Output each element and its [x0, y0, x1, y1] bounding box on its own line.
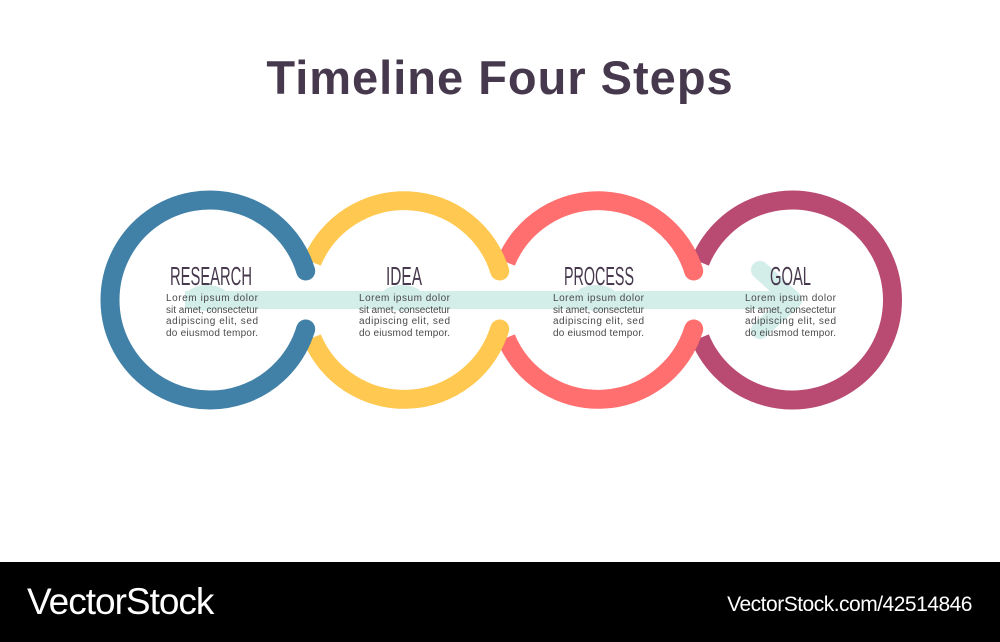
ring: process (red) — [506, 201, 703, 399]
step 1 text — [166, 261, 259, 339]
step 1 text: sit amet, consectetur — [166, 305, 259, 316]
footer bar — [0, 562, 1000, 642]
step 2 text: Lorem ipsum dolor — [359, 293, 451, 304]
step 3 text: sit amet, consectetur — [553, 305, 645, 316]
step 4 text: GOAL — [770, 261, 811, 291]
step 1 text: RESEARCH — [170, 261, 252, 291]
step 1 text: Lorem ipsum dolor — [166, 293, 259, 304]
ring: idea (yellow) — [312, 201, 509, 399]
step 4 text: adipiscing elit, sed — [745, 316, 836, 327]
step 3 text — [553, 261, 645, 339]
step 4 text: Lorem ipsum dolor — [745, 293, 837, 304]
step 4 text: do eiusmod tempor. — [745, 328, 836, 339]
step 2 text — [359, 261, 451, 339]
step 2 text: IDEA — [386, 261, 422, 291]
footer url: VectorStock.com/42514846 — [727, 593, 972, 616]
ring: research (blue) — [110, 200, 315, 400]
step 2 text: sit amet, consectetur — [359, 305, 451, 316]
step 4 text: sit amet, consectetur — [745, 305, 837, 316]
title: Timeline Four Steps — [266, 51, 734, 104]
ring: goal (purple) — [700, 200, 892, 400]
step 3 text: PROCESS — [564, 261, 634, 291]
step 4 text — [745, 261, 837, 339]
step 1 text: do eiusmod tempor. — [166, 328, 258, 339]
step 3 text: Lorem ipsum dolor — [553, 293, 645, 304]
step 3 text: adipiscing elit, sed — [553, 316, 644, 327]
footer logo: VectorStock — [27, 581, 213, 622]
arrow: timeline band — [185, 270, 793, 330]
step 2 text: do eiusmod tempor. — [359, 328, 450, 339]
step 3 text: do eiusmod tempor. — [553, 328, 644, 339]
step 2 text: adipiscing elit, sed — [359, 316, 450, 327]
step 1 text: adipiscing elit, sed — [166, 316, 258, 327]
